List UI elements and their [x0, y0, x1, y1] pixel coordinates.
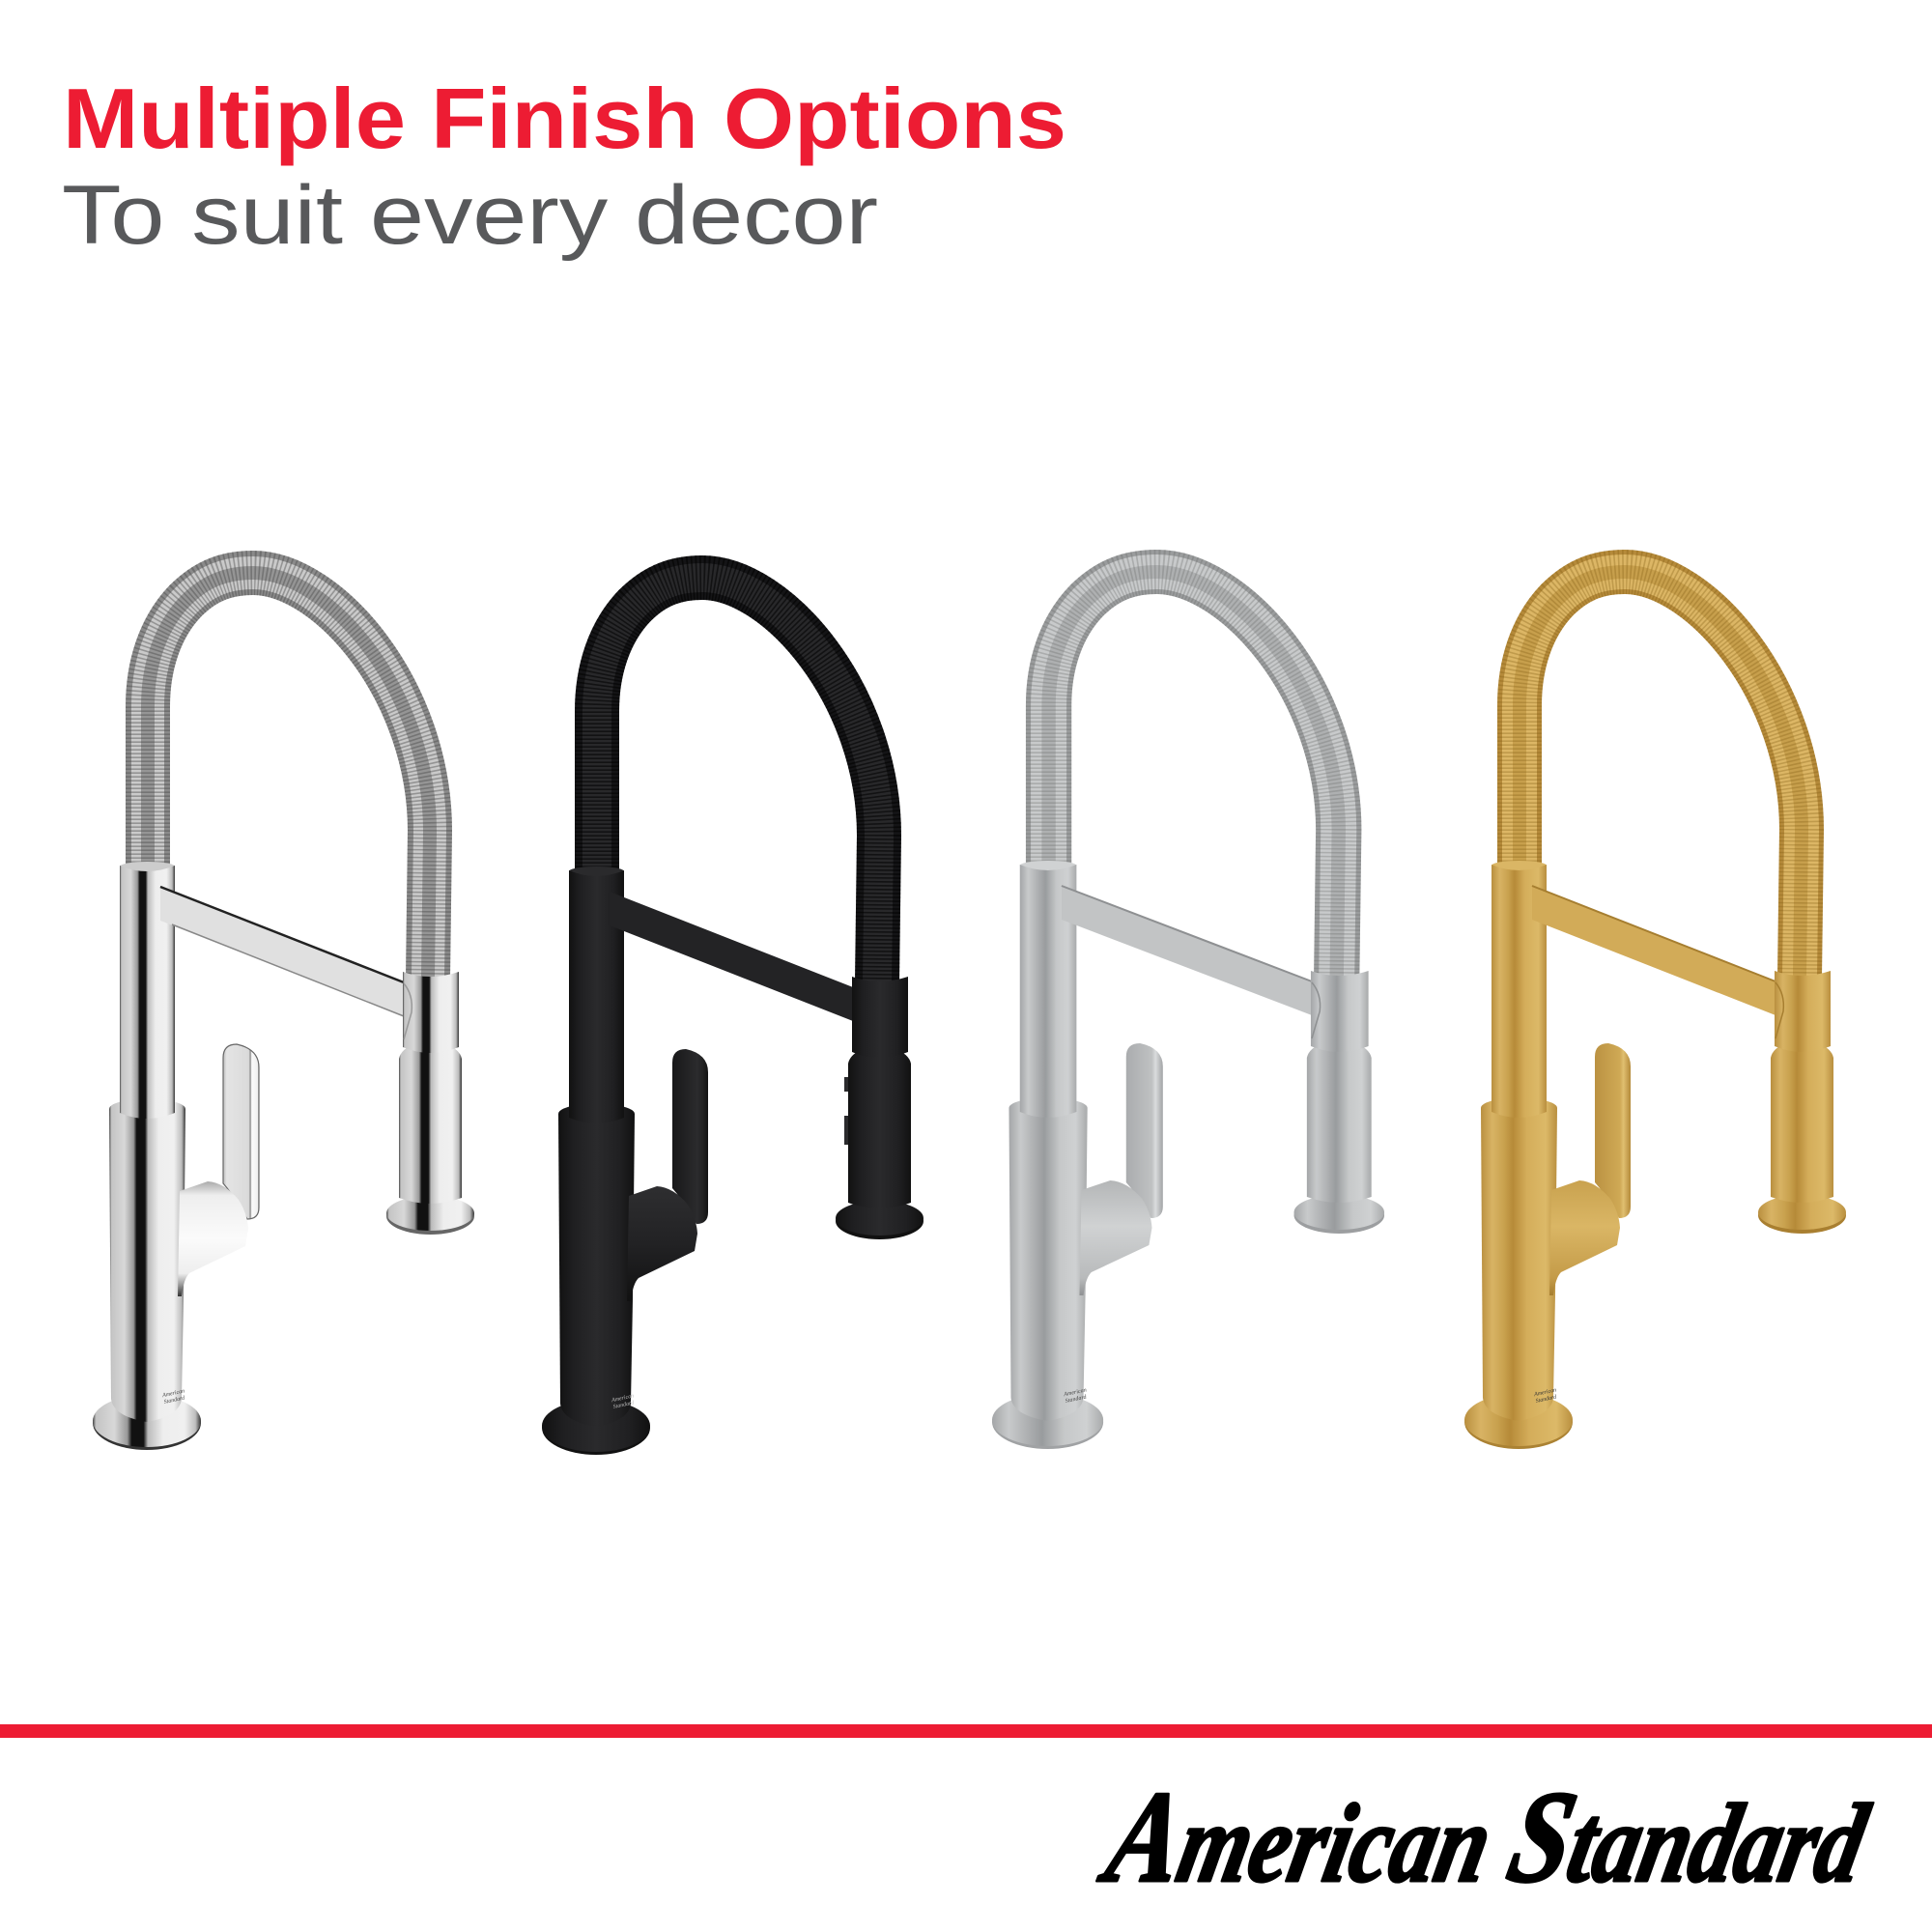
- black lever handle: [672, 1049, 708, 1224]
- black body: [558, 1102, 635, 1427]
- chrome base logo: Standard: [163, 1395, 186, 1406]
- gold base logo: Standard: [1535, 1394, 1558, 1405]
- gold base flange: [1464, 1394, 1573, 1449]
- brushed spout hub: [1079, 1180, 1151, 1295]
- chrome spout hub: [178, 1181, 248, 1296]
- subtitle: To suit every decor: To suit every decor: [62, 169, 878, 262]
- chrome body: [109, 1097, 185, 1422]
- gold ribbed hose: [1520, 572, 1802, 977]
- brushed upper column: [1020, 861, 1076, 1118]
- gold spout hub: [1549, 1180, 1620, 1295]
- brushed rear spray head: [1307, 971, 1372, 1203]
- gold upper column: [1492, 861, 1547, 1118]
- faucet: polished chrome: [93, 573, 474, 1450]
- faucet: brushed nickel: [992, 572, 1384, 1449]
- brushed rear flange: [1294, 1195, 1384, 1234]
- red divider bar: [0, 1724, 1932, 1738]
- chrome lever handle: [223, 1044, 259, 1219]
- gold rear spray head: [1771, 971, 1833, 1203]
- gold body: [1481, 1096, 1557, 1421]
- faucet: brushed gold: [1464, 572, 1846, 1449]
- chrome base logo: American: [161, 1388, 185, 1399]
- gold lever handle: [1595, 1043, 1631, 1218]
- brushed base logo: American: [1063, 1387, 1087, 1398]
- black base logo: Standard: [612, 1400, 636, 1410]
- gold base logo: American: [1533, 1387, 1557, 1398]
- gold rear flange: [1758, 1195, 1846, 1234]
- gold cross bar: [1532, 886, 1776, 1015]
- logo: American Standard wordmark: American Standard: [1090, 1763, 1883, 1910]
- brushed lever handle: [1126, 1043, 1163, 1218]
- black cross bar: [610, 892, 853, 1021]
- brushed base flange: [992, 1394, 1103, 1449]
- black rear spray head: [846, 977, 911, 1208]
- brushed body: [1009, 1096, 1088, 1421]
- chrome upper column: [120, 862, 175, 1119]
- faucet: matte black: [542, 578, 923, 1455]
- chrome base flange: [93, 1395, 201, 1450]
- title: Multiple Finish Options: Multiple Finish Options: [63, 71, 1066, 166]
- brushed base logo: Standard: [1065, 1394, 1088, 1405]
- brushed cross bar: [1062, 886, 1312, 1015]
- black rear flange: [836, 1201, 923, 1239]
- black base logo: American: [611, 1393, 635, 1404]
- black ribbed hose: [597, 578, 879, 982]
- chrome rear flange: [386, 1196, 474, 1235]
- black base flange: [542, 1400, 650, 1455]
- chrome ribbed hose: [148, 573, 430, 978]
- chrome cross bar: [160, 887, 404, 1016]
- brushed ribbed hose: [1049, 572, 1339, 977]
- black spout hub: [627, 1186, 697, 1301]
- chrome rear spray head: [399, 972, 462, 1204]
- black upper column: [569, 867, 624, 1123]
